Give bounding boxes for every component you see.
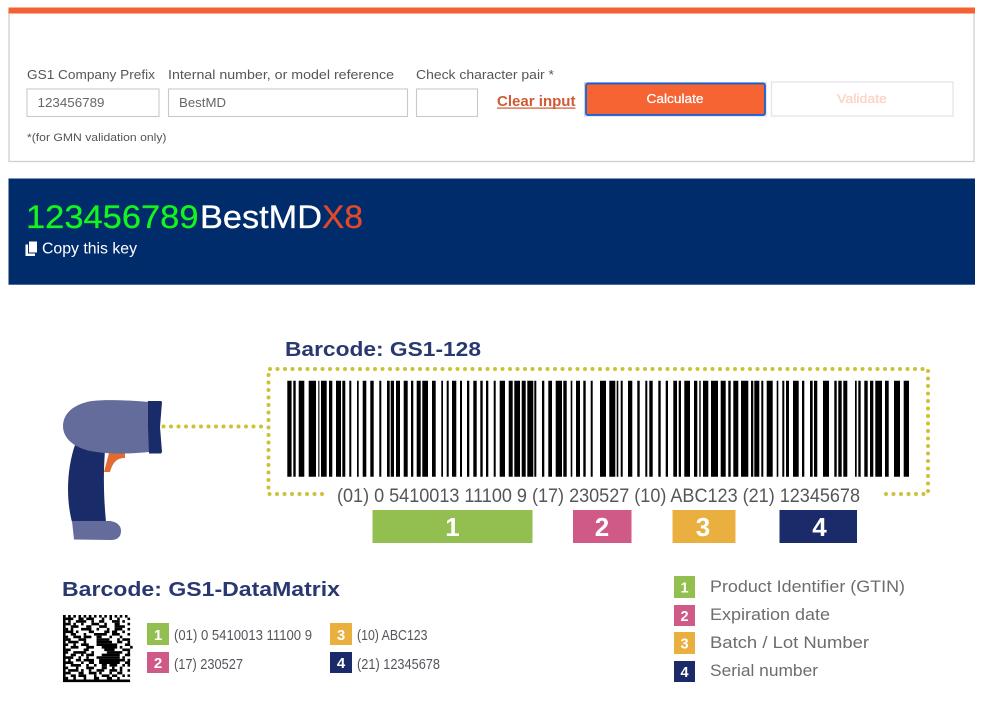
input: model reference: BestMD xyxy=(179,95,226,110)
data matrix key: item 1: (01) 0 5410013 11100 9 xyxy=(174,628,312,644)
copy key text: Copy this key xyxy=(42,240,137,258)
button: calculate: Calculate xyxy=(646,91,704,106)
input: check character pair xyxy=(416,89,478,116)
data matrix key: item 2: 2 xyxy=(154,655,162,672)
badge 3: large: 3 xyxy=(696,512,710,542)
input: company prefix: 123456789 xyxy=(38,95,104,110)
link: clear input: Clear input xyxy=(497,94,576,110)
legend: product identifier: 1 xyxy=(680,580,689,596)
data matrix key: item 3: (10) ABC123 xyxy=(357,628,428,644)
legend: expiration date: Expiration date xyxy=(710,606,830,624)
legend: batch lot number: 3 xyxy=(680,636,689,652)
badge 2: large: 2 xyxy=(595,512,609,542)
scanner nose xyxy=(148,401,162,454)
badge 4: large xyxy=(780,510,857,543)
data matrix key: item 1 xyxy=(147,623,312,645)
badge 3: large xyxy=(672,510,736,543)
badge 4: large: 4 xyxy=(812,512,827,542)
panel: result key xyxy=(8,178,975,285)
data matrix key: item 3 xyxy=(330,623,428,645)
result: company prefix digits: 123456789 xyxy=(26,199,198,235)
legend: serial number: 4 xyxy=(680,665,689,681)
legend: product identifier xyxy=(674,576,905,598)
badge 2: large xyxy=(573,510,632,543)
badge 1: large: 1 xyxy=(445,512,460,542)
label: GS1 Company Prefix: GS1 Company Prefix xyxy=(27,67,156,82)
data matrix key: item 2 xyxy=(147,652,243,673)
heading: GS1-DataMatrix: Barcode: GS1-DataMatrix xyxy=(62,578,341,601)
legend: expiration date xyxy=(674,605,830,626)
legend: serial number: Serial number xyxy=(710,662,819,680)
result: check characters: X8 xyxy=(322,199,363,235)
legend: serial number xyxy=(674,661,819,682)
data matrix key: item 4: (21) 12345678 xyxy=(357,657,440,673)
scanner trigger xyxy=(104,453,125,472)
legend: product identifier: Product Identifier (GTIN) xyxy=(710,578,905,596)
scanner base xyxy=(72,521,121,540)
icon: barcode scanner xyxy=(63,400,162,540)
legend: batch lot number: Batch / Lot Number xyxy=(710,634,870,652)
data matrix key: item 1: 1 xyxy=(154,627,162,644)
data matrix key: item 4: 4 xyxy=(337,655,346,672)
input: company prefix xyxy=(27,89,159,116)
legend: expiration date: 2 xyxy=(680,609,689,625)
button: validate xyxy=(772,82,953,116)
panel: calculator form xyxy=(8,8,975,162)
barcode human-readable text: (01) 0 5410013 11100 9 (17) 230527 (10) ABC123 (21) 12345678 xyxy=(337,486,860,507)
input: model reference xyxy=(168,89,408,116)
barcode: data matrix xyxy=(63,615,133,682)
data matrix key: item 2: (17) 230527 xyxy=(174,657,243,673)
scanner grip xyxy=(68,445,106,522)
scan beam and barcode frame xyxy=(164,369,928,494)
scanner head xyxy=(63,400,149,454)
icon: copy xyxy=(26,242,37,256)
label: internal number: Internal number, or model reference xyxy=(168,67,394,82)
legend: batch lot number xyxy=(674,632,870,654)
label: check character pair: Check character pair * xyxy=(416,67,554,82)
footnote: *(for GMN validation only) xyxy=(27,132,166,144)
heading: GS1-128: Barcode: GS1-128 xyxy=(285,338,481,361)
result: model reference: BestMD xyxy=(200,199,322,235)
data matrix key: item 3: 3 xyxy=(337,627,345,644)
data matrix key: item 4 xyxy=(330,652,440,673)
badge 1: large xyxy=(372,510,532,543)
barcode: GS1-128 bars xyxy=(287,381,909,477)
button: validate: Validate xyxy=(837,91,887,106)
button: calculate xyxy=(584,82,766,116)
